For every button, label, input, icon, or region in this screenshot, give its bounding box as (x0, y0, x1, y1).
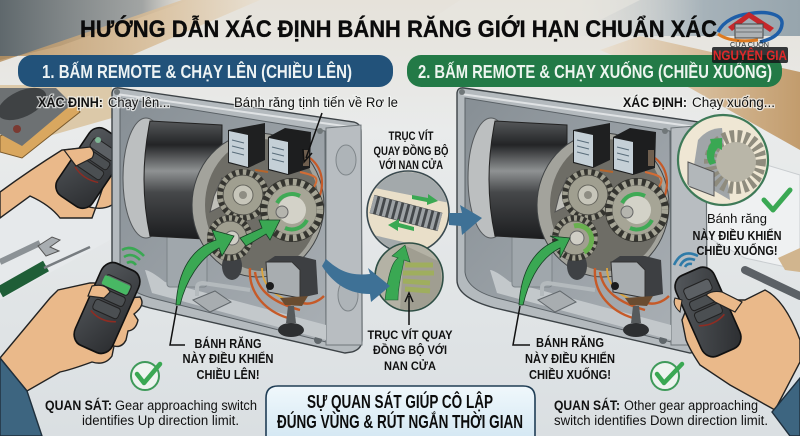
label: gear up (182, 336, 274, 382)
observation left: identifies Up direction limit. (82, 413, 239, 428)
label: gear down: BÁNH RĂNG (536, 335, 604, 350)
label: xác định chạy xuống (623, 95, 775, 110)
left gearbox (112, 88, 362, 353)
observation left: Gear approaching switch (115, 398, 257, 413)
label: shaft top (374, 128, 448, 172)
left wifi signal (122, 248, 144, 265)
logo: NGUYÊN GIA (713, 46, 787, 63)
label: shaft top: TRỤC VÍT (388, 128, 434, 143)
label: shaft bottom (368, 327, 452, 373)
banner: step 1 (18, 55, 393, 87)
label: shaft bottom: ĐỒNG BỘ VỚI (373, 342, 447, 357)
left pointer line (170, 306, 185, 345)
label: right gear: Bánh răng (707, 211, 767, 226)
label: xác định chạy lên: Chạy lên... (108, 95, 170, 110)
title: HƯỚNG DẪN XÁC ĐỊNH BÁNH RĂNG GIỚI HẠN CHUẨN XÁC (80, 14, 717, 43)
banner: step 1: 1. BẤM REMOTE & CHẠY LÊN (CHIỀU LÊN) (42, 61, 352, 82)
label: xác định chạy xuống: Chạy xuống... (692, 95, 775, 110)
screw detail circle (366, 170, 450, 249)
right wifi signal (674, 253, 698, 267)
logo: CỬA CUỐN (730, 39, 769, 49)
label: gear up: NÀY ĐIỀU KHIỂN (182, 351, 274, 366)
left green arrows (176, 220, 280, 305)
right green arrow (519, 236, 570, 305)
label: shaft bottom: NAN CỬA (384, 358, 436, 373)
label: gear up: CHIỀU LÊN! (196, 367, 260, 382)
conclusion box: ĐÚNG VÙNG & RÚT NGẮN THỜI GIAN (277, 411, 523, 432)
tools (0, 237, 90, 292)
label: xác định chạy lên (38, 95, 170, 110)
observation right: switch identifies Down direction limit. (554, 413, 768, 428)
right tools (745, 270, 800, 296)
right pointer line (513, 306, 530, 345)
conclusion box (266, 386, 535, 436)
icon: left check (131, 362, 160, 390)
conclusion box: SỰ QUAN SÁT GIÚP CÔ LẬP (307, 391, 493, 412)
label: gear up: BÁNH RĂNG (194, 336, 262, 351)
label: xác định chạy xuống: XÁC ĐỊNH: (623, 95, 687, 110)
green rotation marks on right gear (622, 194, 652, 229)
banner: step 2 (407, 55, 782, 87)
label: right gear: CHIỀU XUỐNG! (696, 243, 778, 258)
observation right: Other gear approaching (624, 398, 758, 413)
label: gear down (525, 335, 615, 382)
observation left (45, 398, 257, 428)
label: right gear (692, 211, 782, 258)
label: xác định chạy lên: XÁC ĐỊNH: (38, 95, 103, 110)
left hand with remote (bottom) (0, 259, 144, 436)
observation right (554, 398, 768, 428)
label: right gear: NÀY ĐIỀU KHIỂN (692, 228, 782, 243)
right hand with remote (bottom) (671, 263, 800, 436)
multimeter (0, 81, 80, 158)
right gearbox (457, 88, 707, 353)
pointer to gear detail (405, 293, 413, 325)
curved blue arrow to gear detail (322, 259, 390, 302)
green rotation marks on left gear (277, 194, 307, 229)
right gear detail circle (678, 115, 768, 205)
label: gear down: CHIỀU XUỐNG! (529, 367, 611, 382)
logo (712, 12, 788, 63)
gear detail circle (375, 243, 444, 311)
icon: right check (651, 362, 682, 390)
label: relay gear: Bánh răng tịnh tiến về Rơ le (234, 95, 398, 110)
label: shaft top: VỚI NAN CỬA (379, 157, 443, 172)
left hand holding remote (top) (0, 123, 131, 218)
label: gear down: NÀY ĐIỀU KHIỂN (525, 351, 615, 366)
blue arrow to right gearbox (449, 205, 482, 235)
label: shaft bottom: TRỤC VÍT QUAY (368, 327, 452, 342)
observation left: QUAN SÁT: (45, 398, 112, 413)
top right green check (764, 190, 790, 210)
label: shaft top: QUAY ĐỒNG BỘ (374, 143, 448, 158)
pointer to relay (303, 113, 322, 162)
observation right: QUAN SÁT: (554, 398, 620, 413)
